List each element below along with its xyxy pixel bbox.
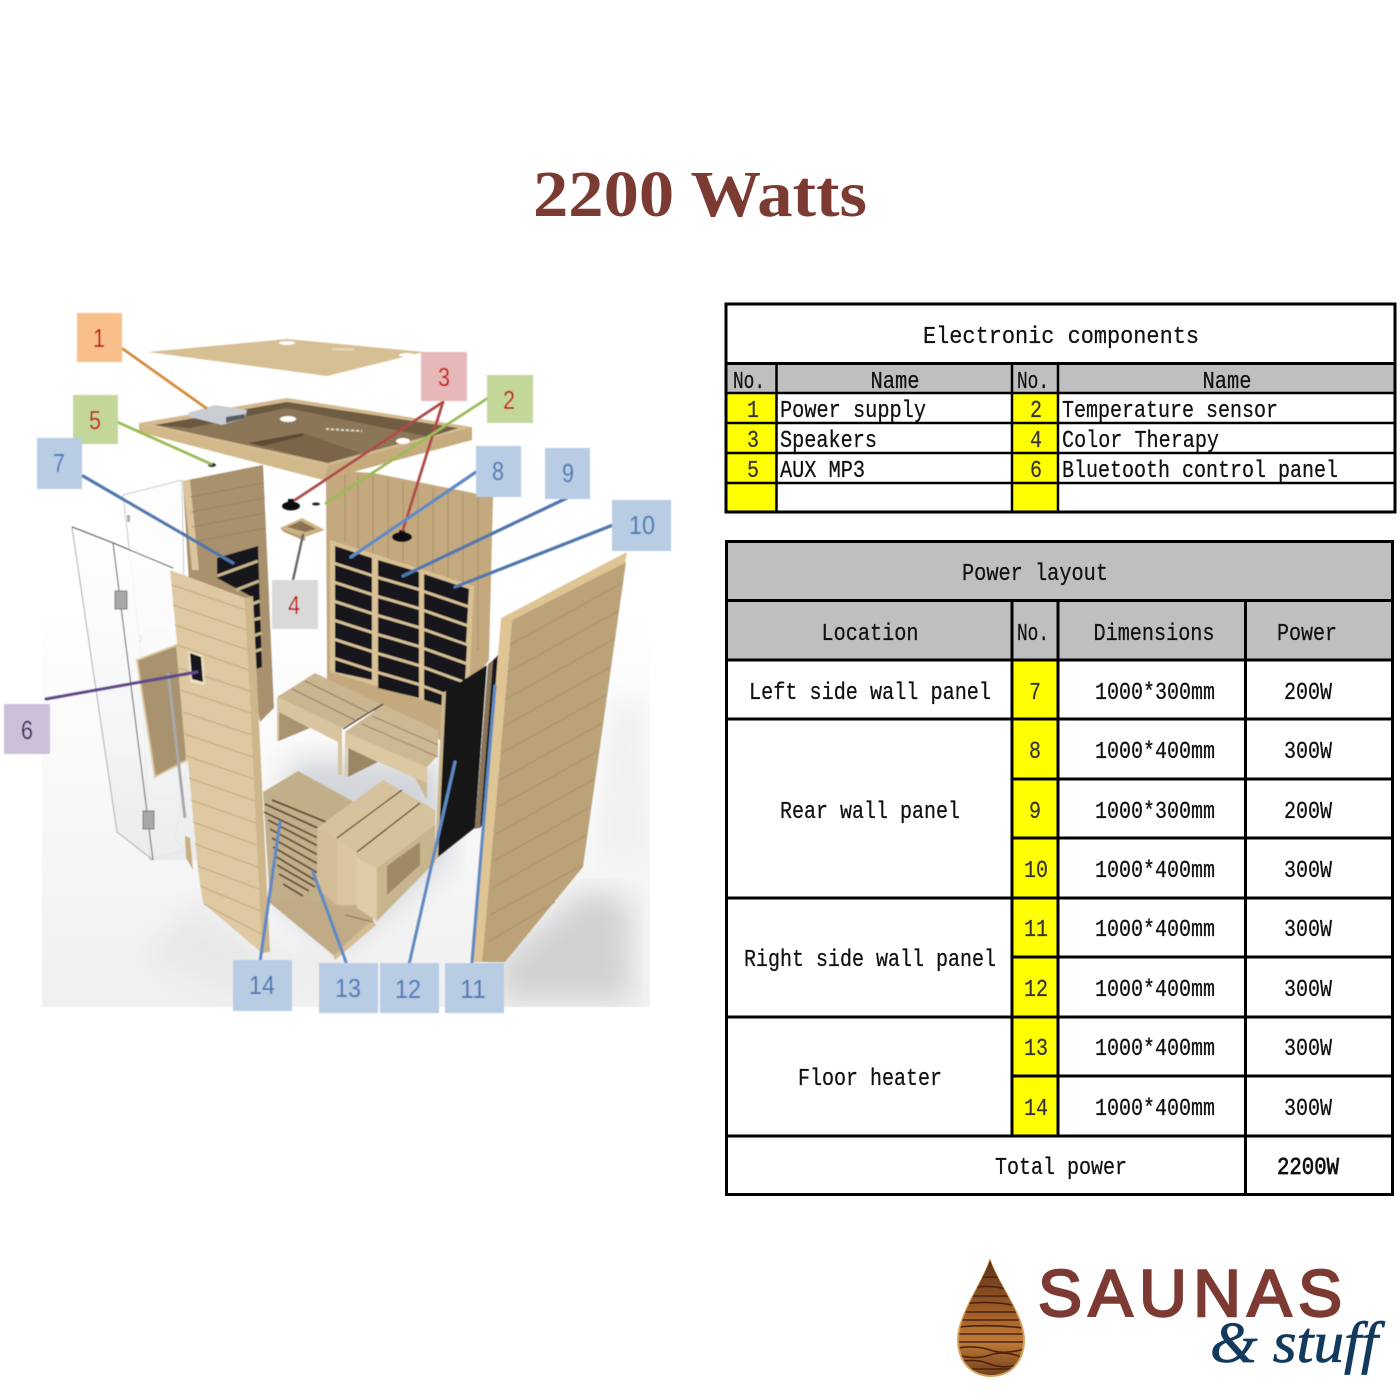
component rows: [747, 398, 1338, 485]
total row: Total power: [995, 1155, 1127, 1182]
dimensions: 1000*400mm: [1095, 1096, 1215, 1123]
table: electronic components: [726, 304, 1395, 512]
power values: 300W: [1284, 739, 1332, 766]
right wall panel: [473, 552, 627, 962]
callout 1: 1: [93, 323, 105, 353]
logo: [955, 1256, 1385, 1378]
dimensions: 1000*400mm: [1095, 739, 1215, 766]
header row: [727, 365, 1394, 396]
callout 13: [319, 963, 378, 1013]
gray header rows: [727, 542, 1393, 660]
dimensions: 1000*400mm: [1095, 1036, 1215, 1063]
ceiling tray: [139, 398, 472, 480]
wordmark: saunas: SAUNAS: [1038, 1256, 1342, 1330]
callout 3: [421, 352, 467, 401]
component rows: Color Therapy: [1062, 428, 1219, 455]
left wall panel: [183, 465, 274, 722]
power values: 300W: [1284, 1096, 1332, 1123]
front left panel: [170, 570, 270, 953]
location labels: Floor heater: [798, 1066, 942, 1093]
rear wall: [326, 470, 493, 740]
location labels: Left side wall panel: [749, 680, 991, 707]
header row: Name: [1202, 369, 1252, 396]
component rows: 2: [1030, 398, 1042, 425]
power supply: [188, 405, 247, 425]
glass back panel: [123, 480, 187, 860]
total row: 2200W: [1277, 1155, 1340, 1182]
callout 2: [487, 375, 533, 423]
power values: 300W: [1284, 858, 1332, 885]
power values: 300W: [1284, 917, 1332, 944]
dimensions: 1000*400mm: [1095, 977, 1215, 1004]
small door panel: [137, 645, 187, 777]
column headings: [822, 621, 1337, 648]
header row: No.: [1017, 369, 1049, 396]
table title: Electronic components: [923, 324, 1199, 351]
leader lines: [46, 349, 613, 969]
control panel: [188, 651, 205, 685]
dimensions: 1000*300mm: [1095, 680, 1215, 707]
callout 12: 12: [395, 974, 421, 1004]
yellow number cells: [727, 393, 1058, 512]
panel numbers: [1024, 680, 1048, 1123]
callout 6: [4, 704, 50, 754]
callout 5: 5: [89, 405, 101, 435]
speaker left: [282, 499, 300, 510]
floor slats: [264, 800, 326, 896]
speaker right: [392, 530, 412, 542]
callout 2: 2: [503, 385, 515, 415]
floor platform: [263, 771, 376, 960]
right black panel: [435, 655, 498, 860]
component rows: Speakers: [780, 428, 877, 455]
glass door: [72, 527, 198, 860]
power values: 200W: [1284, 680, 1332, 707]
callout 14: [233, 960, 292, 1011]
door handle: [168, 673, 185, 818]
panel numbers: 11: [1024, 917, 1048, 944]
AUX port: [208, 463, 216, 467]
callout 8: [476, 446, 521, 497]
component rows: 1: [747, 398, 759, 425]
header row: No.: [733, 369, 765, 396]
power values: 300W: [1284, 1036, 1332, 1063]
callout 3: 3: [438, 362, 450, 392]
grid lines: [726, 542, 1393, 1195]
component rows: 4: [1030, 428, 1042, 455]
grid lines: [726, 304, 1395, 512]
panel numbers: 9: [1029, 799, 1041, 826]
color therapy box: [280, 518, 325, 541]
component rows: 3: [747, 428, 759, 455]
left wall heater: [217, 546, 262, 669]
wordmark: and stuff: & stuff: [1210, 1310, 1385, 1375]
callout 1: [77, 313, 122, 362]
callout 4: [272, 580, 318, 629]
callout 8: 8: [492, 456, 504, 486]
callout 7: 7: [53, 448, 65, 478]
location labels: Rear wall panel: [780, 799, 960, 826]
location labels: [744, 680, 996, 1093]
power values: [1284, 680, 1332, 1123]
rear wall heater grid: [330, 540, 474, 714]
column headings: Power: [1277, 621, 1337, 648]
callout 4: 4: [288, 590, 300, 620]
ceiling top sheet: [148, 339, 424, 376]
column headings: Dimensions: [1094, 621, 1214, 648]
table title: Power layout: [962, 561, 1108, 588]
component rows: 5: [747, 458, 759, 485]
panel numbers: 12: [1024, 977, 1048, 1004]
rear benches: [277, 673, 438, 800]
callout 9: 9: [562, 458, 574, 488]
title: 2200 Watts: [533, 158, 867, 231]
temperature sensor: [312, 502, 320, 506]
total row: [995, 1155, 1340, 1182]
callout 14: 14: [249, 970, 275, 1000]
dimensions: 1000*400mm: [1095, 858, 1215, 885]
callout 5: [73, 395, 118, 444]
callout 13: 13: [335, 973, 361, 1003]
callout 7: [37, 438, 82, 489]
component rows: Temperature sensor: [1062, 398, 1278, 425]
callout 12: [380, 963, 439, 1013]
header row: Name: [870, 369, 920, 396]
callout 6: 6: [21, 715, 33, 745]
column headings: Location: [822, 621, 918, 648]
dimensions: [1095, 680, 1215, 1123]
panel numbers: 10: [1024, 858, 1048, 885]
dimensions: 1000*400mm: [1095, 917, 1215, 944]
panel numbers: 8: [1029, 739, 1041, 766]
table: power layout: [726, 542, 1393, 1195]
callout 10: 10: [629, 510, 655, 540]
floor background: [42, 600, 650, 1007]
component rows: 6: [1030, 458, 1042, 485]
panel numbers: 7: [1029, 680, 1041, 707]
power values: 200W: [1284, 799, 1332, 826]
callout 11: [445, 963, 504, 1013]
component rows: Bluetooth control panel: [1062, 458, 1338, 485]
panel numbers: 13: [1024, 1036, 1048, 1063]
component rows: Power supply: [780, 398, 926, 425]
callout 9: [545, 448, 590, 499]
location labels: Right side wall panel: [744, 947, 996, 974]
power values: 300W: [1284, 977, 1332, 1004]
front seat box: [317, 780, 435, 921]
exploded sauna diagram: [4, 313, 671, 1013]
callout 10: [612, 500, 671, 551]
panel numbers: 14: [1024, 1096, 1048, 1123]
column headings: No.: [1017, 621, 1049, 648]
component rows: AUX MP3: [780, 458, 865, 485]
callout 11: 11: [460, 974, 486, 1004]
dimensions: 1000*300mm: [1095, 799, 1215, 826]
icon: wood drop: [955, 1258, 1027, 1378]
yellow number column: [1012, 660, 1058, 1136]
